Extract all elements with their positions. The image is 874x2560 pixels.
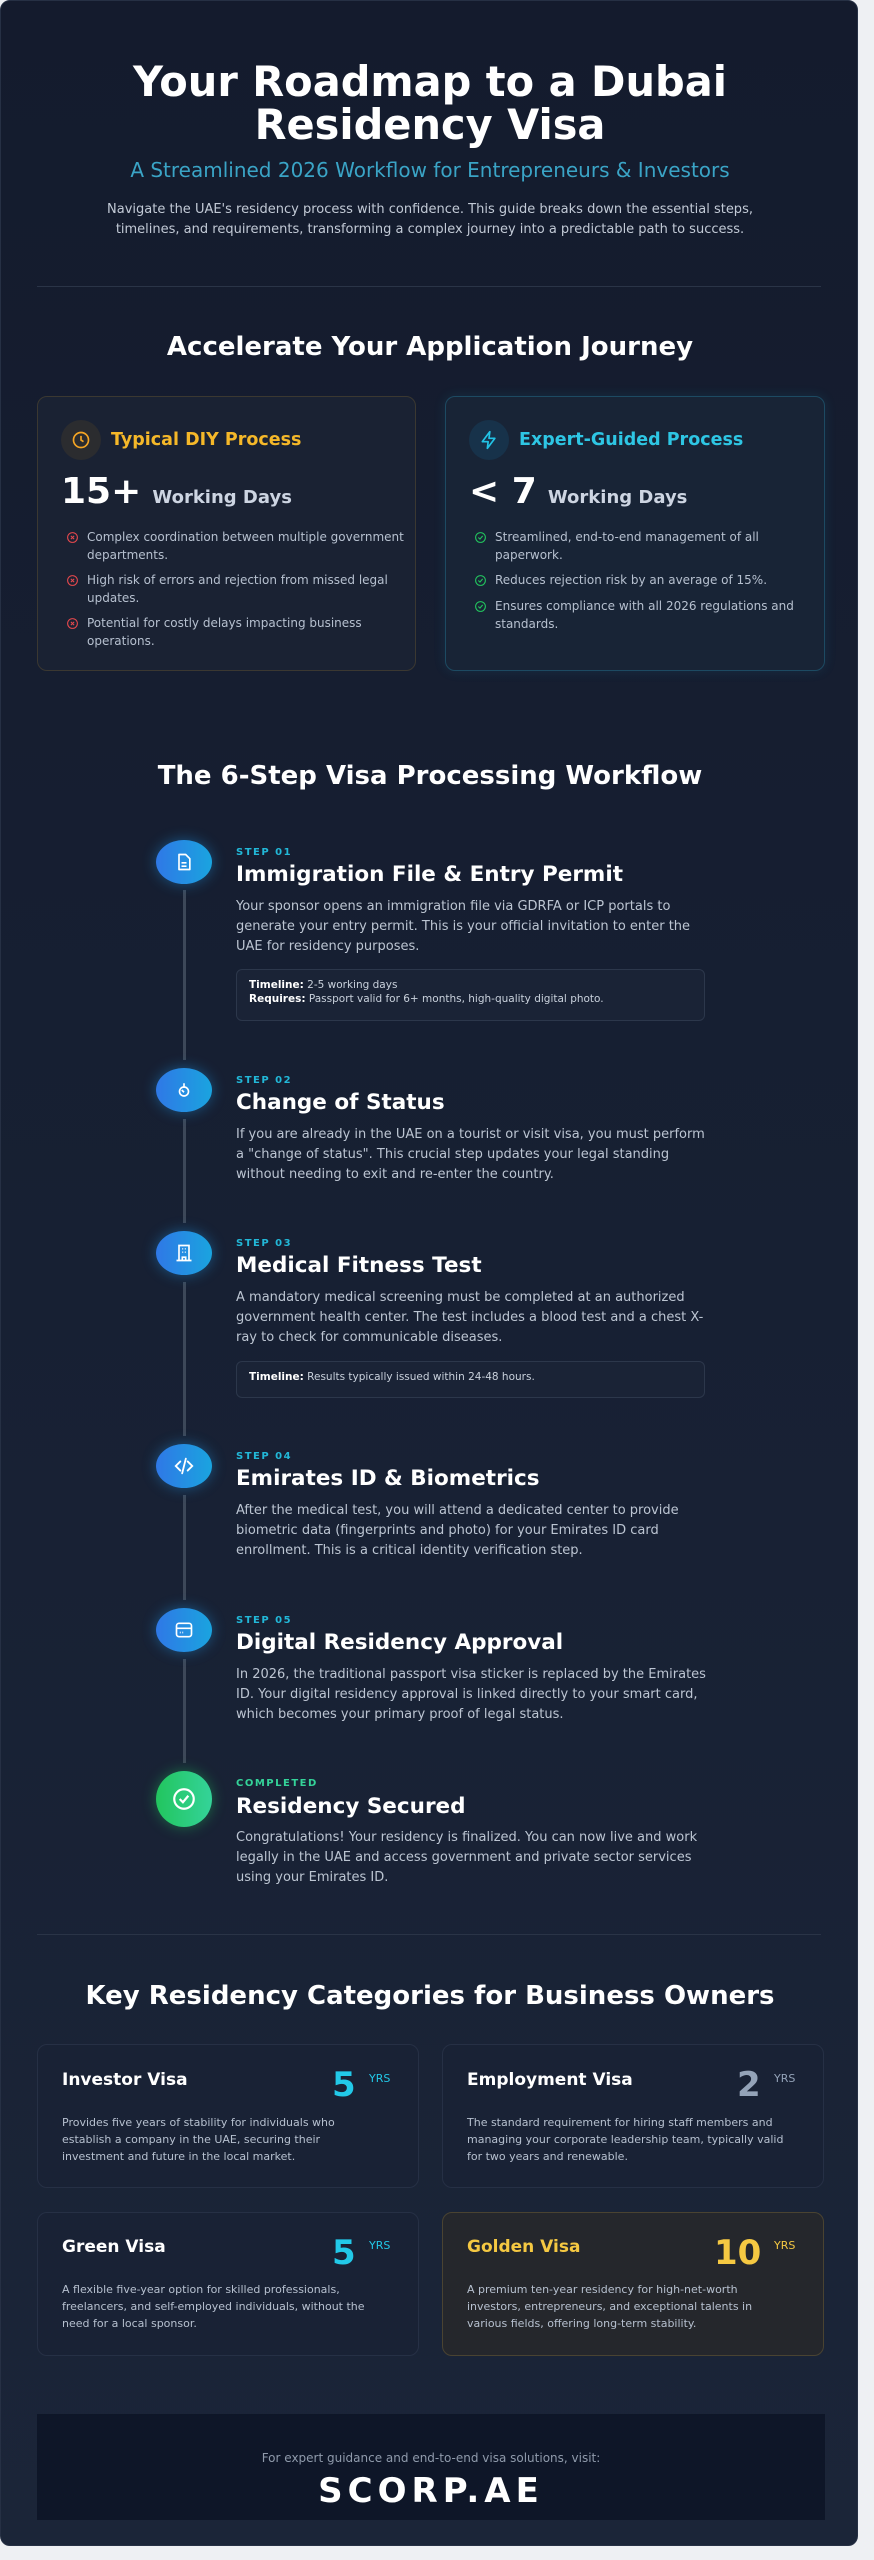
card: investor visa: 5 (332, 2065, 356, 2105)
info box (236, 969, 705, 1021)
card: golden visa: 10 (714, 2233, 761, 2273)
title: Residency Visa (255, 100, 605, 149)
card: green visa: 5 (332, 2233, 356, 2273)
heading: categories: Key Residency Categories for Business Owners (85, 1981, 775, 2011)
info box: Timeline: Results typically issued within 24-48 hours. (249, 1371, 535, 1383)
step 6: completed (149, 1764, 697, 1885)
card: green visa: Green Visa (62, 2237, 166, 2257)
list: expert benefits: Reduces rejection risk by an average of 15%. (495, 573, 767, 587)
card: golden visa: Golden Visa (467, 2237, 580, 2257)
card: employment visa (442, 2044, 824, 2188)
panel: DIY process (37, 396, 416, 671)
info box: Requires: Passport valid for 6+ months, high-quality digital photo. (249, 992, 604, 1004)
step 5: In 2026, the traditional passport visa sticker is replaced by the Emirates ID. Your digital residency approval is linked directly to your smart card, which becomes your primary proof of legal status. (236, 1667, 706, 1722)
icon: building (156, 1231, 212, 1275)
icon: document (156, 840, 212, 884)
intro text: Navigate the UAE's residency process with confidence. This guide breaks down the essential steps, timelines, and requirements, transforming a complex journey into a predictable path to success. (107, 202, 753, 237)
step 1: Immigration File & Entry Permit (236, 862, 623, 887)
icon: clock (61, 420, 101, 460)
footer: For expert guidance and end-to-end visa solutions, visit: (262, 2451, 600, 2465)
stat: < 7 Working Days (469, 471, 687, 512)
list: DIY drawbacks: Potential for costly delays impacting business operations. (87, 616, 362, 648)
card: investor visa: Provides five years of stability for individuals who establish a company in the UAE, securing their investment and future in the local market. (62, 2116, 335, 2163)
step 4: Emirates ID & Biometrics (236, 1466, 540, 1491)
step 6: completed: Congratulations! Your residency is finalized. You can now live and work legally in the UAE and access government and private sector services using your Emirates ID. (236, 1830, 697, 1885)
step 5 (149, 1600, 706, 1722)
list: expert benefits: Ensures compliance with all 2026 regulations and standards. (495, 599, 794, 631)
step 6: completed: COMPLETED (236, 1778, 318, 1789)
icon: code (156, 1444, 212, 1488)
card: employment visa: Employment Visa (467, 2070, 633, 2090)
step 3: STEP 03 (236, 1238, 292, 1249)
step 6: completed: Residency Secured (236, 1794, 466, 1819)
icon: check circle (156, 1771, 212, 1827)
step 5: STEP 05 (236, 1615, 292, 1626)
list: DIY drawbacks: Complex coordination between multiple government departments. (87, 530, 404, 562)
info box: Timeline: 2-5 working days (249, 979, 397, 991)
list: DIY drawbacks (67, 530, 404, 648)
icon: fingerprint (156, 1068, 212, 1112)
step 3: Medical Fitness Test (236, 1253, 482, 1278)
card: green visa: A flexible five-year option for skilled professionals, freelancers, and self-employed individuals, without the need for a local sponsor. (62, 2283, 365, 2330)
heading: accelerate: Accelerate Your Application Journey (167, 332, 693, 362)
card: investor visa: Investor Visa (62, 2070, 188, 2090)
subtitle: A Streamlined 2026 Workflow for Entrepreneurs & Investors (130, 158, 730, 182)
panel: expert process (445, 396, 825, 671)
info box (236, 1361, 705, 1398)
step 3 (149, 1224, 705, 1398)
card: golden visa (442, 2212, 824, 2356)
card: golden visa: A premium ten-year residency for high-net-worth investors, entrepreneurs, and exceptional talents in various fields, offering long-term stability. (467, 2283, 752, 2330)
card: employment visa: The standard requirement for hiring staff members and managing your corporate leadership team, typically valid for two years and renewable. (467, 2116, 783, 2163)
step 2: STEP 02 (236, 1075, 292, 1086)
footer (37, 2414, 825, 2520)
icon: card (156, 1608, 212, 1652)
card: golden visa: YRS (774, 2239, 795, 2252)
list: DIY drawbacks: High risk of errors and rejection from missed legal updates. (87, 573, 388, 605)
step 2: Change of Status (236, 1090, 445, 1115)
step 1: Your sponsor opens an immigration file via GDRFA or ICP portals to generate your entry permit. This is your official invitation to enter the UAE for residency purposes. (236, 899, 690, 954)
card: employment visa: YRS (774, 2072, 795, 2085)
step 4: STEP 04 (236, 1451, 292, 1462)
step 2 (149, 1060, 705, 1182)
list: expert benefits: Streamlined, end-to-end management of all paperwork. (495, 530, 759, 562)
step 2: If you are already in the UAE on a tourist or visit visa, you must perform a "change of status". This crucial step updates your legal standing without needing to exit and re-enter the country. (236, 1127, 705, 1182)
footer: SCORP.AE (318, 2471, 544, 2511)
heading: workflow: The 6-Step Visa Processing Workflow (158, 761, 702, 791)
step 5: Digital Residency Approval (236, 1630, 563, 1655)
list: expert benefits (475, 530, 794, 631)
card title: Typical DIY Process (111, 430, 301, 450)
stat: 15+ Working Days (61, 471, 292, 512)
step 1: STEP 01 (236, 847, 292, 858)
title: Your Roadmap to a Dubai (133, 57, 727, 106)
step 3: A mandatory medical screening must be completed at an authorized government health center. The test includes a blood test and a chest X-ray to check for communicable diseases. (236, 1290, 703, 1345)
icon: bolt (469, 420, 509, 460)
card: investor visa: YRS (369, 2072, 390, 2085)
step 1 (149, 832, 705, 1021)
card: investor visa (37, 2044, 419, 2188)
card: green visa: YRS (369, 2239, 390, 2252)
card: employment visa: 2 (737, 2065, 761, 2105)
step 4 (149, 1436, 679, 1558)
title (132, 57, 727, 149)
card: green visa (37, 2212, 419, 2356)
step 4: After the medical test, you will attend a dedicated center to provide biometric data (fingerprints and photo) for your Emirates ID card enrollment. This is a critical identity verification step. (236, 1503, 679, 1558)
card title: Expert-Guided Process (519, 430, 743, 450)
